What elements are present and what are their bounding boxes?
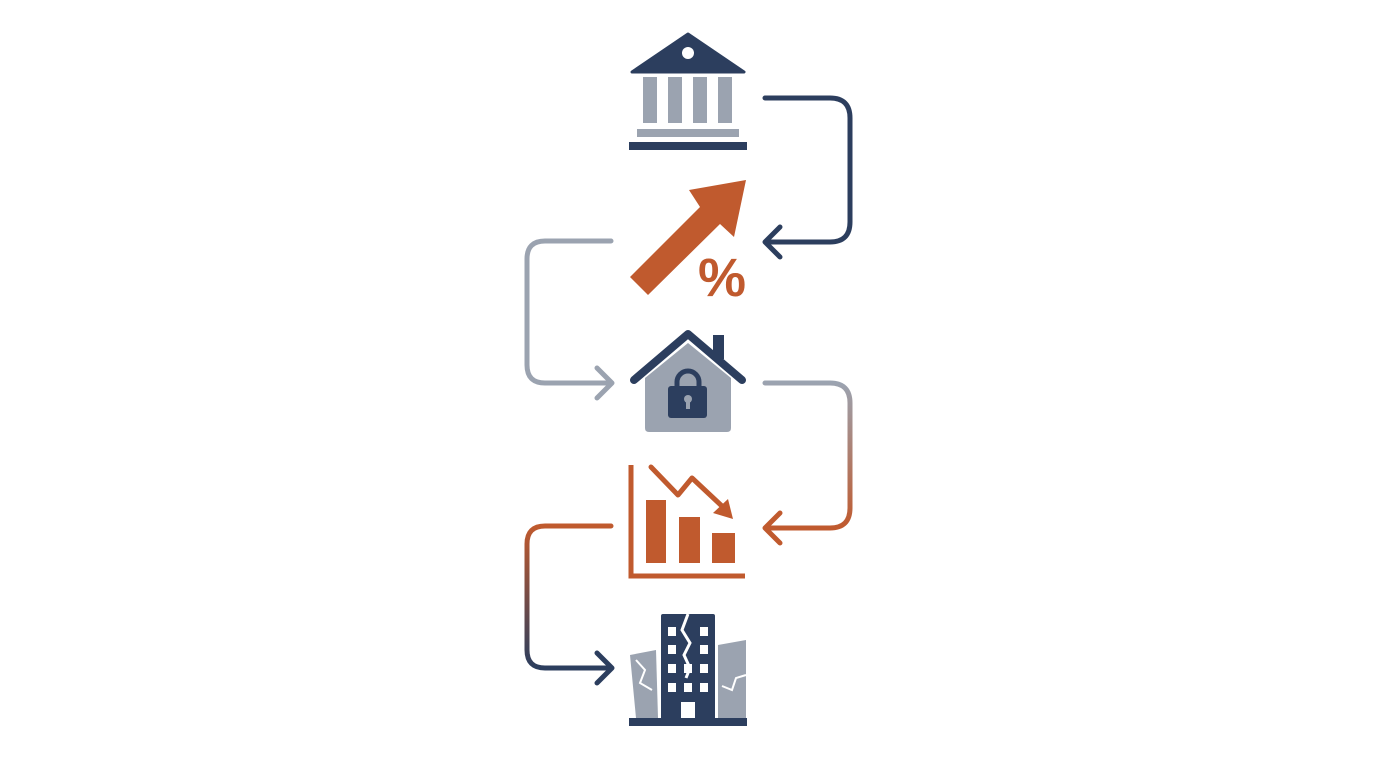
icon: rising interest rate arrow [630,180,746,308]
arrow: bank to rates [765,98,850,257]
icon: central bank [629,34,747,150]
icon: cracked buildings [629,614,747,726]
icon: locked house [634,334,742,432]
arrow: decline to construction crisis [527,526,612,683]
icon: rising interest rate arrow: % [698,248,746,308]
arrow: housing to market decline [765,383,850,543]
icon: declining bar chart [631,465,745,576]
arrow: rates to housing [527,241,612,398]
